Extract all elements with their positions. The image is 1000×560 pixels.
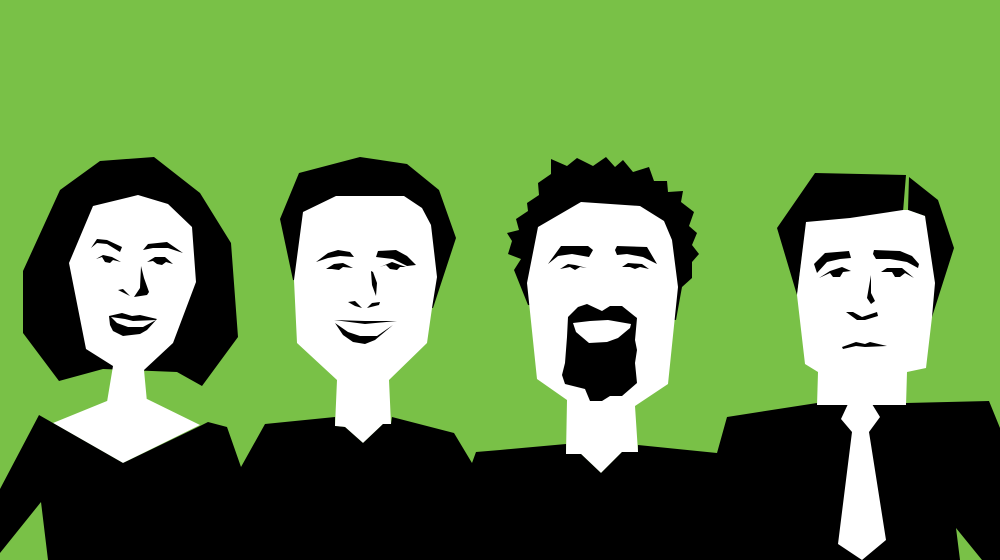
man two right eye: [380, 262, 406, 270]
man two left eyebrow: [316, 250, 354, 262]
man three right eyebrow: [615, 246, 657, 264]
man four right eyebrow: [873, 250, 919, 268]
woman hair: [23, 157, 238, 386]
man three left eye: [560, 264, 587, 270]
man two lower lip: [335, 323, 393, 344]
man two left nostril: [348, 301, 362, 308]
man four nose: [867, 275, 875, 304]
man two upper lip: [334, 320, 397, 324]
woman right eyebrow: [143, 242, 183, 253]
man two left eye: [326, 263, 353, 270]
person 2: smiling man: [280, 157, 456, 443]
woman face and neck: [69, 195, 196, 402]
man four tie: [838, 404, 886, 560]
black clothing of all four people: [0, 401, 1000, 560]
man four hair left: [777, 173, 906, 295]
man three left eyebrow: [548, 246, 593, 264]
man four left eye: [819, 267, 851, 278]
person 3: bearded man: [507, 157, 699, 473]
man two nose: [371, 271, 377, 296]
woman nostril: [118, 289, 130, 296]
woman right eye: [147, 257, 173, 265]
woman left eyebrow: [91, 239, 122, 252]
woman mouth: [109, 313, 157, 336]
man three face and neck: [527, 202, 678, 473]
man three beard: [562, 304, 637, 401]
man three curly hair: [507, 157, 699, 320]
woman left eye: [96, 255, 121, 263]
man two right eyebrow: [376, 250, 416, 266]
man three right eye: [622, 263, 649, 269]
man three mouth: [573, 320, 631, 343]
man four right eye: [881, 268, 914, 278]
person 1: woman: [23, 157, 238, 463]
woman chest: [53, 399, 200, 463]
man four hair right: [908, 177, 954, 317]
man four mouth: [842, 342, 887, 349]
man two face and neck: [294, 196, 437, 443]
man four nostrils: [846, 312, 878, 320]
person 4: man with tie: [777, 173, 954, 406]
man four left eyebrow: [814, 251, 851, 273]
man two right nostril: [367, 302, 380, 308]
woman nose: [134, 266, 149, 297]
woman teeth: [111, 317, 156, 327]
man two hair: [280, 157, 456, 308]
man four face and neck: [797, 210, 935, 406]
